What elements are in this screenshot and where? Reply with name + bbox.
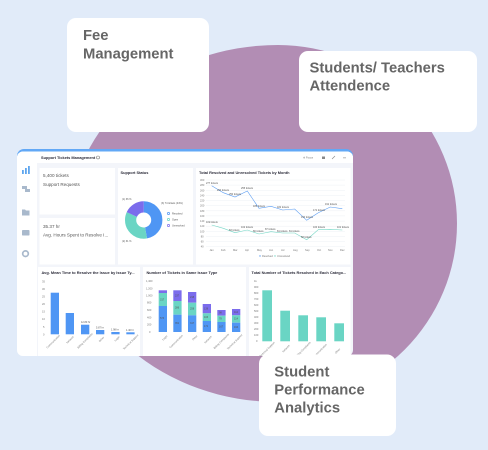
y axis labels: 240: [200, 193, 205, 197]
data labels: 100 tickets: [313, 226, 326, 229]
panel: tickets resolved bar chart: 300: [254, 321, 259, 325]
kpi: average hours: Avg. Hours Spent to Resolve I...: [43, 232, 108, 238]
panel: tickets by issue type stacked bar chart: Number of Tickets in Same Issue Type: [146, 270, 218, 275]
data labels: 150 tickets: [301, 216, 314, 219]
x axis months: Oct: [317, 248, 321, 252]
panel: tickets resolved bar chart: Total Number of Tickets Resolved in Each Catego...: [252, 270, 346, 275]
panel: tickets resolved bar chart: 400: [254, 315, 259, 319]
x labels: Network: [203, 334, 213, 344]
data labels: 81 tickets: [289, 230, 300, 233]
stack values: 351: [175, 322, 180, 325]
x labels: [45, 331, 139, 351]
line legend: Unresolved: [277, 254, 291, 258]
data labels: [206, 182, 350, 239]
x labels: Network: [281, 343, 291, 353]
x labels: [258, 340, 341, 358]
line legend: Resolved: [262, 254, 273, 258]
donut legend: [167, 212, 185, 228]
stack values: 138: [204, 308, 209, 310]
panel: tickets resolved bar chart: 500: [254, 309, 259, 313]
x labels: Communication: [168, 333, 184, 349]
y axis labels: 40: [201, 245, 204, 249]
card: students teachers attendence: Students/ Teachers: [310, 61, 445, 77]
kpi: support requests: Support Requests: [43, 182, 80, 187]
x labels: Other: [191, 334, 199, 341]
x labels: [161, 332, 243, 351]
x axis months: Mar: [233, 248, 238, 252]
data labels: 260 tickets: [217, 189, 230, 192]
bar values: 1.98 hr: [111, 328, 119, 332]
x axis months: Jan: [210, 248, 214, 252]
x axis months: Jul: [281, 248, 285, 252]
stack values: 317: [160, 298, 165, 302]
kpi: support requests: 5,400 tickets: [43, 173, 69, 178]
panel: tickets by issue type stacked bar chart: 800: [147, 301, 152, 305]
x labels: Login: [113, 335, 121, 342]
card: fee management: Fee: [83, 28, 108, 44]
data labels: 277 tickets: [206, 182, 219, 185]
panel: tickets by issue type stacked bar chart: 400: [147, 315, 152, 319]
bar values: 5.87 hr: [96, 326, 104, 330]
stack values: 164: [234, 326, 239, 329]
card: students teachers attendence: [299, 51, 477, 132]
card: fee management: [67, 18, 209, 132]
panel: average mean time bar chart: 30: [42, 287, 45, 291]
x labels: Login: [161, 334, 169, 341]
panel: tickets resolved bar chart: 900: [254, 285, 259, 289]
y axis labels: 80: [201, 234, 204, 238]
panel: support status donut: Support Status: [120, 170, 148, 175]
stack values: 167: [219, 326, 224, 328]
y axis labels: 260: [200, 188, 205, 192]
stack values: 218: [190, 296, 195, 299]
x axis months: [210, 248, 345, 252]
x labels: Technical Support: [226, 333, 243, 351]
bar values: 1.40 hr: [126, 329, 134, 332]
panel: support status donut: (1) 36 %: [122, 198, 132, 201]
card: students teachers attendence: Attendence: [310, 79, 390, 95]
stack values: 78: [219, 318, 222, 320]
x axis months: Apr: [245, 248, 249, 252]
icon: bar chart: [22, 166, 30, 174]
icon: table: [22, 186, 30, 192]
card: student performance analytics: [259, 354, 396, 436]
x labels: Billing Complaints: [294, 340, 312, 358]
bar values: 12.80 hr: [81, 321, 90, 324]
y axis labels: 280: [200, 183, 205, 187]
y axis labels: 60: [201, 240, 204, 244]
donut legend: Unresolved: [172, 224, 185, 228]
icon: settings: [23, 251, 28, 256]
bars: [51, 293, 135, 334]
dashboard window: [17, 149, 353, 358]
x labels: Communication: [45, 333, 61, 349]
x labels: Technical Support: [258, 341, 276, 358]
panel: tickets by issue type stacked bar chart: 600: [147, 308, 152, 312]
stack values: 237: [175, 294, 180, 298]
x labels: Billing Complaints: [76, 331, 94, 349]
x labels: Other: [98, 335, 105, 343]
y axis labels: 100: [200, 229, 205, 233]
panel: average mean time bar chart: [38, 267, 140, 356]
y axis labels: 140: [200, 219, 205, 223]
panel: tickets by issue type stacked bar chart: 200: [147, 323, 152, 327]
y axis labels: 160: [200, 214, 205, 218]
panel: tickets resolved bar chart: 100: [254, 333, 259, 337]
stack values: 317: [190, 322, 195, 325]
card: student performance analytics: Student: [274, 365, 329, 381]
data labels: 101 tickets: [337, 226, 350, 229]
x axis months: Sep: [305, 248, 310, 252]
card: student performance analytics: Performance: [274, 382, 365, 398]
x axis months: May: [257, 248, 263, 252]
stack values: [160, 294, 239, 329]
data labels: 171 tickets: [313, 209, 326, 212]
panel: tickets resolved bar chart: [249, 267, 350, 358]
panel: tickets by issue type stacked bar chart: 1,000: [146, 293, 153, 297]
x labels: Technical Support: [122, 333, 139, 351]
donut legend: Resolved: [172, 212, 183, 216]
panel: average mean time bar chart: 25: [42, 294, 45, 298]
stack values: 573: [160, 317, 165, 320]
icon: mail: [22, 230, 30, 236]
x axis months: Jun: [269, 248, 274, 252]
data labels: 185 tickets: [253, 205, 266, 208]
data labels: 83 tickets: [229, 229, 240, 232]
kpi: support requests: [40, 168, 115, 214]
panel: tickets by issue type stacked bar chart: 0: [149, 330, 151, 334]
stack values: 98: [219, 312, 222, 314]
x labels: Communication: [312, 342, 328, 358]
panel: tickets by issue type stacked bar chart: 1,400: [146, 279, 153, 283]
data labels: 58 tickets: [301, 236, 312, 239]
kpi: average hours: [40, 218, 115, 264]
line: unresolved: [212, 225, 342, 240]
stacked bars: [159, 290, 240, 332]
panel: tickets resolved bar chart: 200: [254, 327, 259, 331]
stack values: 258: [190, 308, 195, 310]
stack values: 171: [204, 325, 209, 328]
x axis months: Feb: [221, 248, 226, 252]
line legend: [259, 254, 291, 258]
background circle: [70, 45, 457, 402]
panel: tickets by issue type stacked bar chart: 1,200: [146, 286, 153, 290]
x labels: Network: [65, 334, 75, 344]
y axis labels: 300: [200, 178, 205, 182]
y axis labels: [200, 178, 205, 249]
y axis labels: 120: [200, 224, 205, 228]
x labels: Billing Complaints: [213, 332, 230, 350]
panel: resolved and unresolved line chart: Total Resolved and Unresolved Tickets by Month: [199, 170, 290, 175]
panel: tickets resolved bar chart: 700: [254, 297, 259, 301]
panel: average mean time bar chart: 0: [43, 332, 45, 336]
data labels: 182 tickets: [277, 206, 290, 209]
card: student performance analytics: Analytics: [274, 400, 340, 416]
dashboard header: [37, 152, 353, 163]
x axis months: Nov: [328, 248, 333, 252]
panel: support status donut: (2) 31 %: [122, 240, 132, 243]
panel: tickets resolved bar chart: 1k: [254, 279, 257, 283]
y axis labels: 200: [200, 204, 205, 208]
panel: tickets by issue type stacked bar chart: [143, 267, 246, 356]
donut legend: Open: [172, 218, 179, 222]
stack values: 112: [234, 311, 239, 314]
panel: support status donut: (3) 74 tickets (44%): [161, 202, 183, 205]
icon: folder: [22, 210, 30, 216]
panel: average mean time bar chart: 15: [42, 310, 45, 314]
data labels: 102 tickets: [241, 226, 254, 229]
data labels: 87 tickets: [265, 228, 276, 231]
panel: average mean time bar chart: 20: [42, 302, 45, 306]
panel: resolved and unresolved line chart: [196, 168, 350, 264]
line: resolved: [212, 186, 342, 220]
x labels: Other: [334, 347, 341, 355]
stack values: 114: [234, 318, 239, 320]
panel: average mean time bar chart: 10: [42, 317, 45, 321]
y axis labels: 180: [200, 209, 205, 213]
y axis labels: 220: [200, 198, 205, 202]
kpi: average hours: 35.37 hr: [43, 224, 60, 229]
data labels: 81 tickets: [277, 230, 288, 233]
x axis months: Dec: [340, 248, 345, 252]
donut chart: [131, 207, 157, 233]
grid lines: [206, 180, 345, 247]
card: fee management: Management: [83, 47, 174, 63]
dashboard header: Support Tickets Management: [41, 155, 96, 160]
bars: [262, 290, 344, 341]
bar values: [81, 321, 134, 332]
panel: tickets resolved bar chart: 600: [254, 303, 259, 307]
data labels: 255 tickets: [241, 187, 254, 190]
data labels: 119 tickets: [206, 221, 219, 224]
dashboard header: ⚙ Focus: [303, 156, 314, 160]
stack values: 286: [175, 306, 180, 310]
panel: average mean time bar chart: Avg. Mean Time to Resolve the Issue by Issue Ty...: [42, 270, 135, 275]
panel: average mean time bar chart: 5: [43, 325, 45, 329]
x axis months: Aug: [293, 248, 298, 252]
data labels: 80 tickets: [253, 230, 264, 233]
data labels: 250 tickets: [229, 193, 242, 196]
panel: tickets resolved bar chart: 0: [256, 339, 258, 343]
panel: tickets resolved bar chart: 800: [254, 291, 259, 295]
panel: average mean time bar chart: 35: [42, 280, 45, 284]
stack values: 103: [204, 316, 209, 319]
sidebar: [17, 152, 37, 356]
data labels: 191 tickets: [325, 203, 338, 206]
panel: support status donut: [118, 168, 193, 264]
